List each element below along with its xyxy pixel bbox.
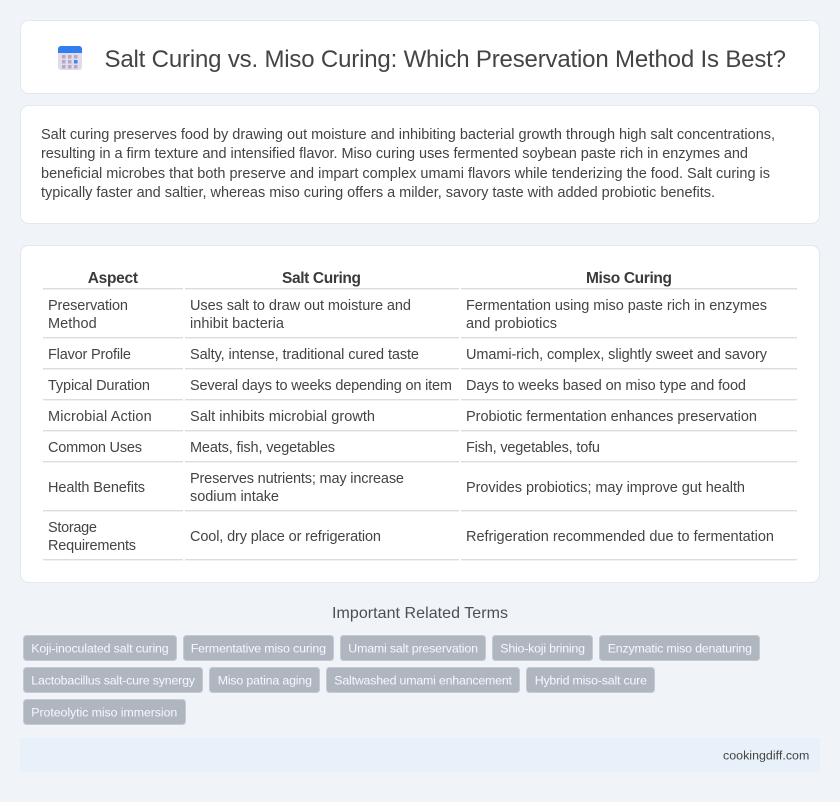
row: flavor profile — [48, 347, 768, 363]
table header row: Salt Curing — [282, 270, 361, 287]
summary text: typically faster and saltier, whereas miso curing offers a milder, savory taste with added probiotic benefits. — [41, 185, 715, 201]
row: health benefits: Provides probiotics; may improve gut health — [466, 480, 745, 496]
row: typical duration: Days to weeks based on miso type and food — [466, 378, 746, 394]
table header row: Miso Curing — [586, 270, 672, 287]
row: typical duration — [48, 378, 746, 394]
row: health benefits — [48, 471, 745, 505]
tag: Miso patina aging — [218, 673, 312, 687]
row: typical duration: Typical Duration — [48, 378, 150, 394]
row: common uses — [48, 440, 600, 456]
row: storage requirements: Refrigeration recommended due to fermentation — [466, 529, 774, 545]
row: flavor profile: Umami-rich, complex, slightly sweet and savory — [466, 347, 768, 363]
icon: calendar — [58, 46, 82, 70]
row: common uses: Common Uses — [48, 440, 142, 456]
footer bar — [20, 738, 820, 772]
tag: Proteolytic miso immersion — [31, 705, 177, 719]
tag: Fermentative miso curing — [191, 641, 326, 655]
row: preservation method: Uses salt to draw out moisture and — [190, 298, 411, 314]
row: preservation method: Fermentation using miso paste rich in enzymes — [466, 298, 767, 314]
tag — [24, 700, 186, 724]
row: microbial action: Salt inhibits microbial growth — [190, 409, 375, 425]
summary text: Salt curing preserves food by drawing out moisture and inhibiting bacterial growth through high salt concentrations, — [41, 127, 775, 143]
row: microbial action: Microbial Action — [48, 409, 152, 425]
row: storage requirements: Storage — [48, 520, 97, 536]
row: flavor profile: Flavor Profile — [48, 347, 131, 363]
tag — [326, 668, 520, 692]
tag — [24, 668, 202, 692]
table row rules — [43, 288, 797, 560]
row: flavor profile: Salty, intense, traditional cured taste — [190, 347, 419, 363]
heading: important related terms: Important Related Terms — [332, 605, 508, 622]
row: health benefits: sodium intake — [190, 489, 279, 505]
tag — [526, 668, 654, 692]
summary text — [41, 127, 775, 201]
row: preservation method — [48, 298, 767, 332]
tag: Lactobacillus salt-cure synergy — [31, 673, 196, 687]
row: common uses: Fish, vegetables, tofu — [466, 440, 600, 456]
tag — [210, 668, 320, 692]
tag: Saltwashed umami enhancement — [334, 673, 513, 687]
tag: Umami salt preservation — [348, 641, 478, 655]
row: preservation method: inhibit bacteria — [190, 316, 285, 332]
row: preservation method: Method — [48, 316, 97, 332]
tag: Enzymatic miso denaturing — [608, 641, 752, 655]
title: Salt Curing vs. Miso Curing: Which Preservation Method Is Best? — [104, 46, 786, 73]
table header row: Aspect — [88, 270, 138, 287]
tag — [184, 636, 334, 660]
tags: related terms — [24, 636, 760, 724]
row: health benefits: Preserves nutrients; may increase — [190, 471, 404, 487]
tag — [600, 636, 760, 660]
row: preservation method: and probiotics — [466, 316, 557, 332]
tag: Shio-koji brining — [500, 641, 585, 655]
row: microbial action — [48, 409, 757, 425]
tag: Hybrid miso-salt cure — [535, 673, 647, 687]
tag — [24, 636, 176, 660]
footer source: cookingdiff.com — [723, 748, 809, 762]
panel: header — [20, 20, 820, 94]
panel: comparison table — [20, 246, 820, 582]
tag: Koji-inoculated salt curing — [31, 641, 169, 655]
row: microbial action: Probiotic fermentation enhances preservation — [466, 409, 757, 425]
row: storage requirements — [48, 520, 774, 554]
table header row — [88, 270, 672, 287]
summary text: beneficial microbes that both preserve and impart complex umami flavors while tenderizing the food. Salt curing is — [41, 166, 770, 182]
row: storage requirements: Cool, dry place or refrigeration — [190, 529, 381, 545]
tag — [492, 636, 592, 660]
panel: summary — [20, 106, 820, 224]
row: health benefits: Health Benefits — [48, 480, 145, 496]
row: preservation method: Preservation — [48, 298, 128, 314]
tag — [340, 636, 486, 660]
summary text: resulting in a firm texture and intensified flavor. Miso curing uses fermented soybean paste rich in enzymes and — [41, 146, 748, 162]
row: typical duration: Several days to weeks depending on item — [190, 378, 452, 394]
row: storage requirements: Requirements — [48, 538, 136, 554]
row: common uses: Meats, fish, vegetables — [190, 440, 335, 456]
